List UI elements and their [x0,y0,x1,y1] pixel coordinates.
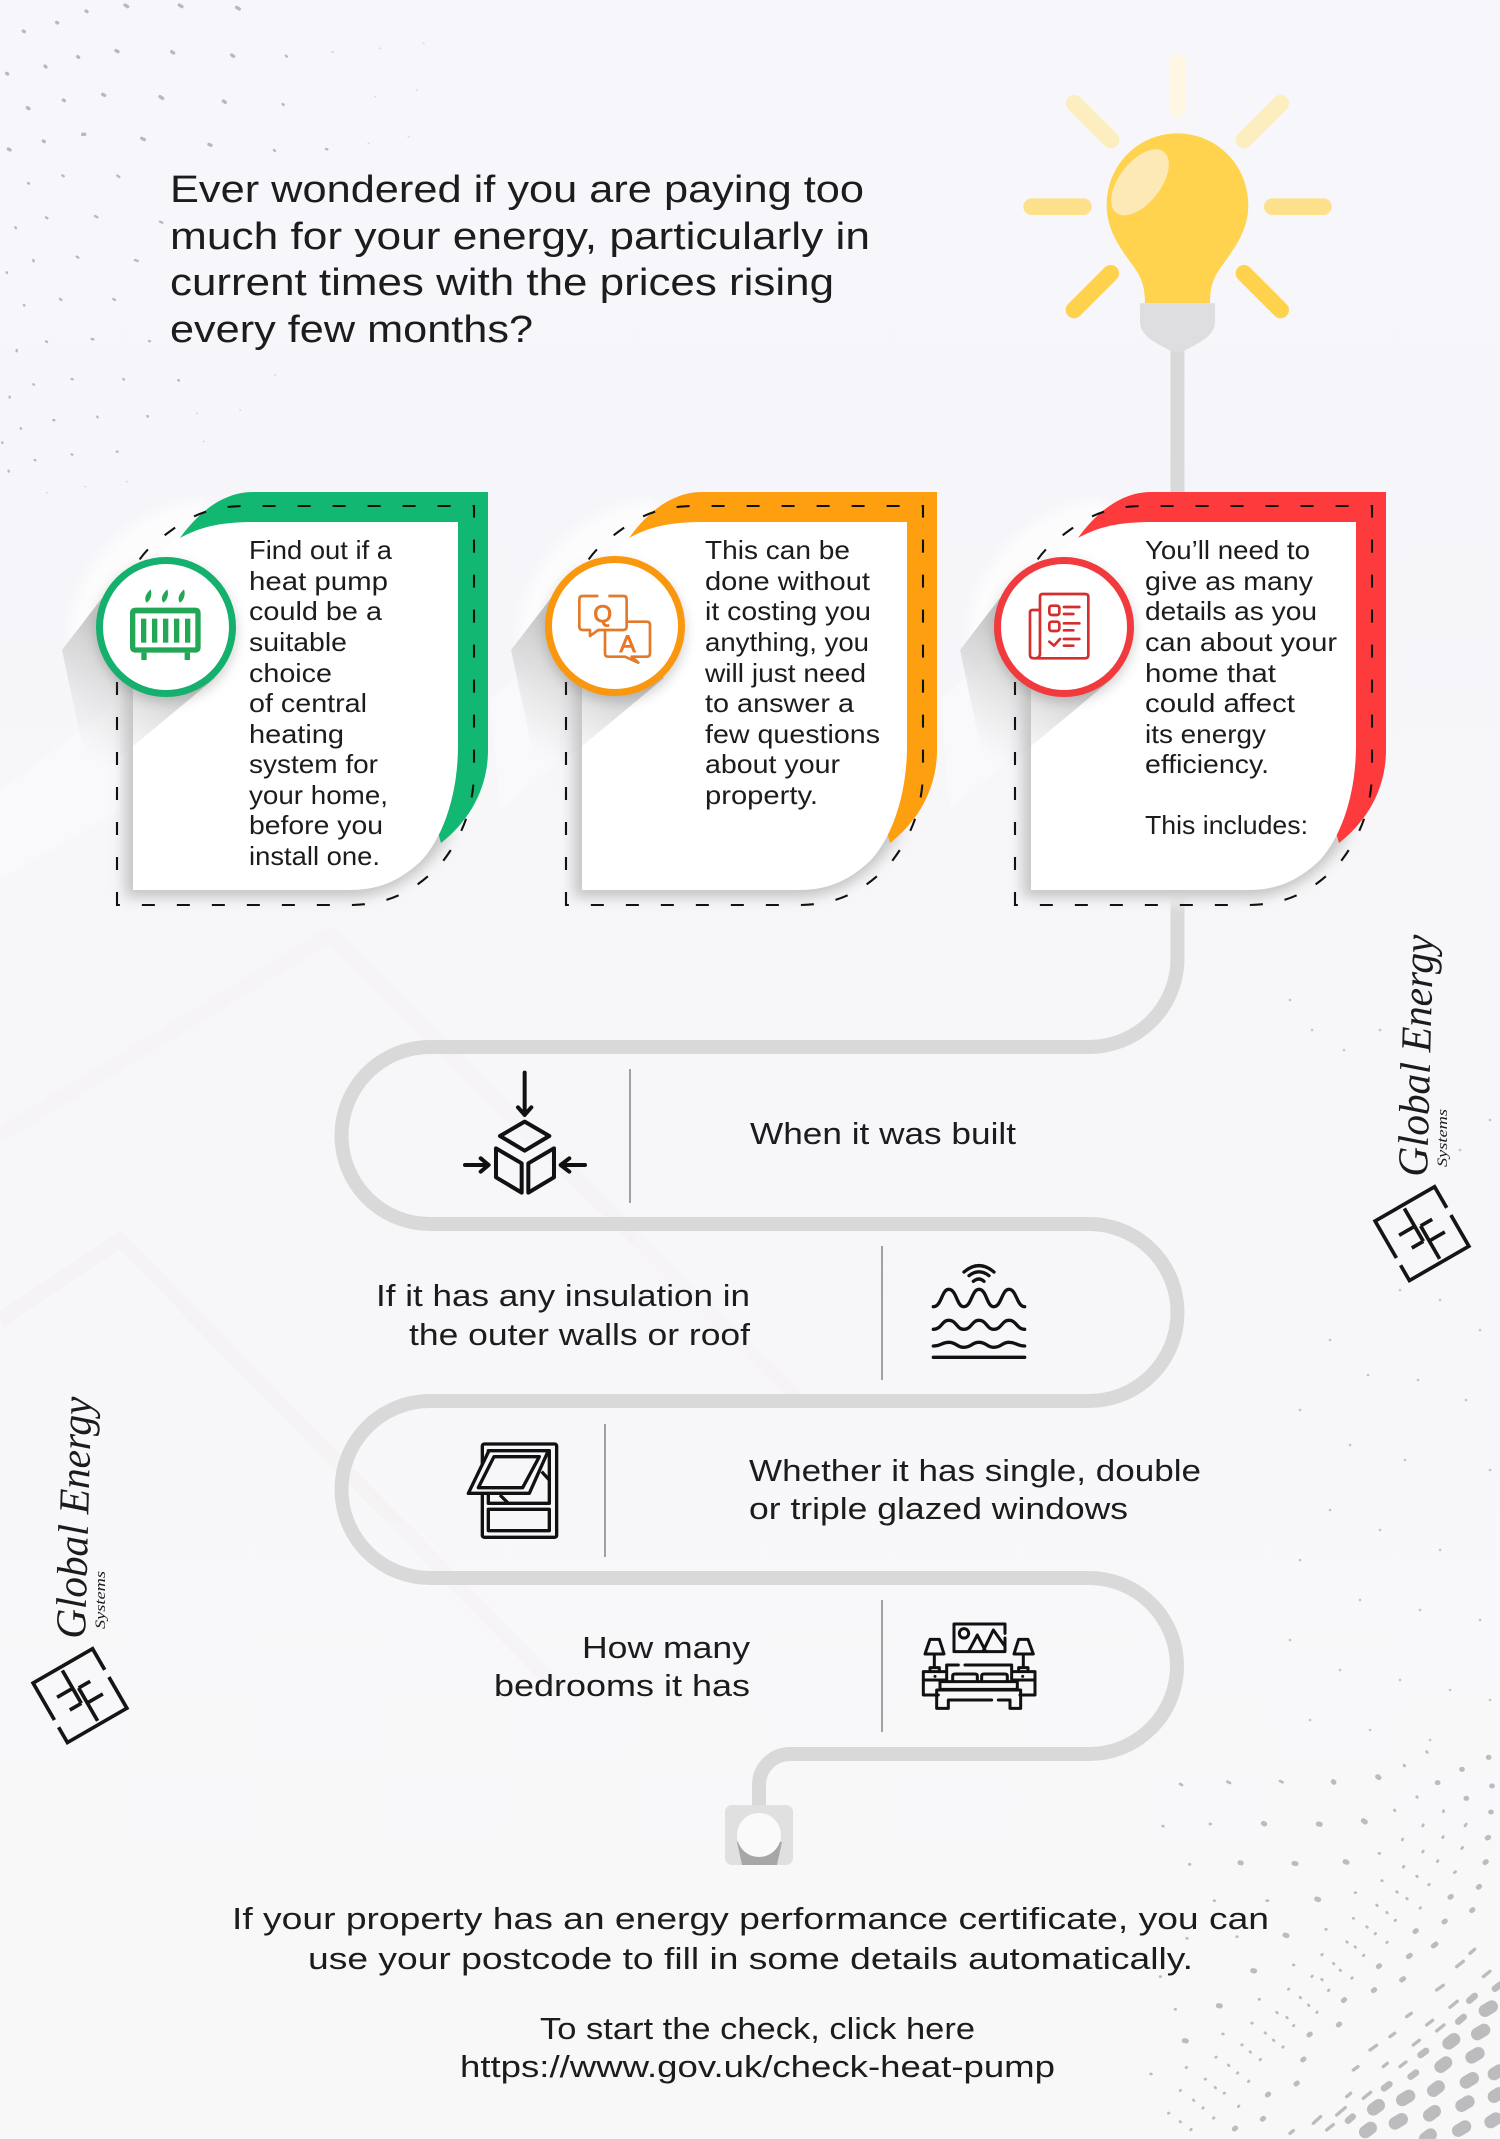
card text [704,535,880,810]
card text: heating [249,719,344,749]
step: bedrooms [494,1600,1035,1732]
icon: bed with lamps [923,1624,1035,1708]
card text: This includes: [1145,810,1308,840]
step: insulation: If it has any insulation in [376,1278,750,1313]
icon: Q and A speech bubbles: Q [593,601,612,628]
footer text: use your postcode to fill in some details automatically. [308,1941,1193,1976]
panel: heat pump card [62,492,488,905]
card text: could be a [249,596,383,626]
step: glazing: or triple glazed windows [749,1491,1128,1526]
icon: radiator [96,560,236,702]
card text: will just need [704,658,866,688]
step: bedrooms: How many [582,1630,751,1665]
step: bedrooms: bedrooms it has [494,1668,750,1703]
step: insulation: the outer walls or roof [409,1317,750,1352]
card text [1145,535,1337,840]
card text: few questions [705,719,880,749]
card text: about your [705,749,840,779]
icon: wall plug [725,1805,793,1865]
card text: of central [249,688,367,718]
icon: compressed cube [465,1073,585,1193]
card text: could affect [1145,688,1296,718]
icon: window [468,1444,557,1537]
power cable [342,350,1178,1812]
footer text: https://www.gov.uk/check-heat-pump [460,2049,1055,2084]
icon: checklist document [994,560,1134,702]
logo: Global Energy Systems, left: Global Energy [48,1395,101,1639]
card text: suitable [249,627,347,657]
logo: Global Energy Systems, left [33,1395,127,1743]
icon: Q and A speech bubbles: A [620,631,636,658]
card text: can about your [1145,627,1337,657]
step: glazing [468,1424,1201,1557]
card text: anything, you [705,627,869,657]
card text: done without [705,566,871,596]
card text: heat pump [249,566,388,596]
step: when it was built: When it was built [750,1116,1016,1151]
panel: details card [960,492,1386,905]
card text: details as you [1145,596,1317,626]
heading [170,169,870,351]
card text: it costing you [705,596,871,626]
logo: Global Energy Systems, right [1375,933,1469,1281]
logo: Global Energy Systems, left: Systems [93,1571,109,1629]
logo: Global Energy Systems, right: Systems [1435,1109,1451,1167]
icon: Q and A speech bubbles [545,560,685,702]
card text: You’ll need to [1145,535,1310,565]
card text: before you [249,810,383,840]
heading: Ever wondered if you are paying too [170,169,864,211]
logo: Global Energy Systems, right: Global Energy [1390,933,1443,1177]
step: glazing: Whether it has single, double [749,1453,1201,1488]
card text: system for [249,749,378,779]
footer text: To start the check, click here [540,2011,975,2046]
card text: its energy [1145,719,1266,749]
icon: insulation waves [933,1266,1025,1357]
step: when it was built [465,1069,1016,1203]
card text [249,535,393,871]
card text: Find out if a [249,535,393,565]
panel: questions card [511,492,937,905]
footer text [232,1901,1269,2084]
icon: light bulb [1032,62,1323,352]
card text: home that [1145,658,1277,688]
card text: give as many [1145,566,1313,596]
footer text: If your property has an energy performance certificate, you can [232,1901,1269,1936]
step: insulation [376,1246,1025,1380]
card text: property. [705,780,818,810]
card text: install one. [249,841,380,871]
heading: much for your energy, particularly in [170,216,870,258]
card text: This can be [705,535,850,565]
heading: every few months? [170,309,533,351]
card text: your home, [249,780,388,810]
heading: current times with the prices rising [170,262,834,304]
card text: choice [249,658,332,688]
card text: to answer a [705,688,855,718]
card text: efficiency. [1145,749,1269,779]
